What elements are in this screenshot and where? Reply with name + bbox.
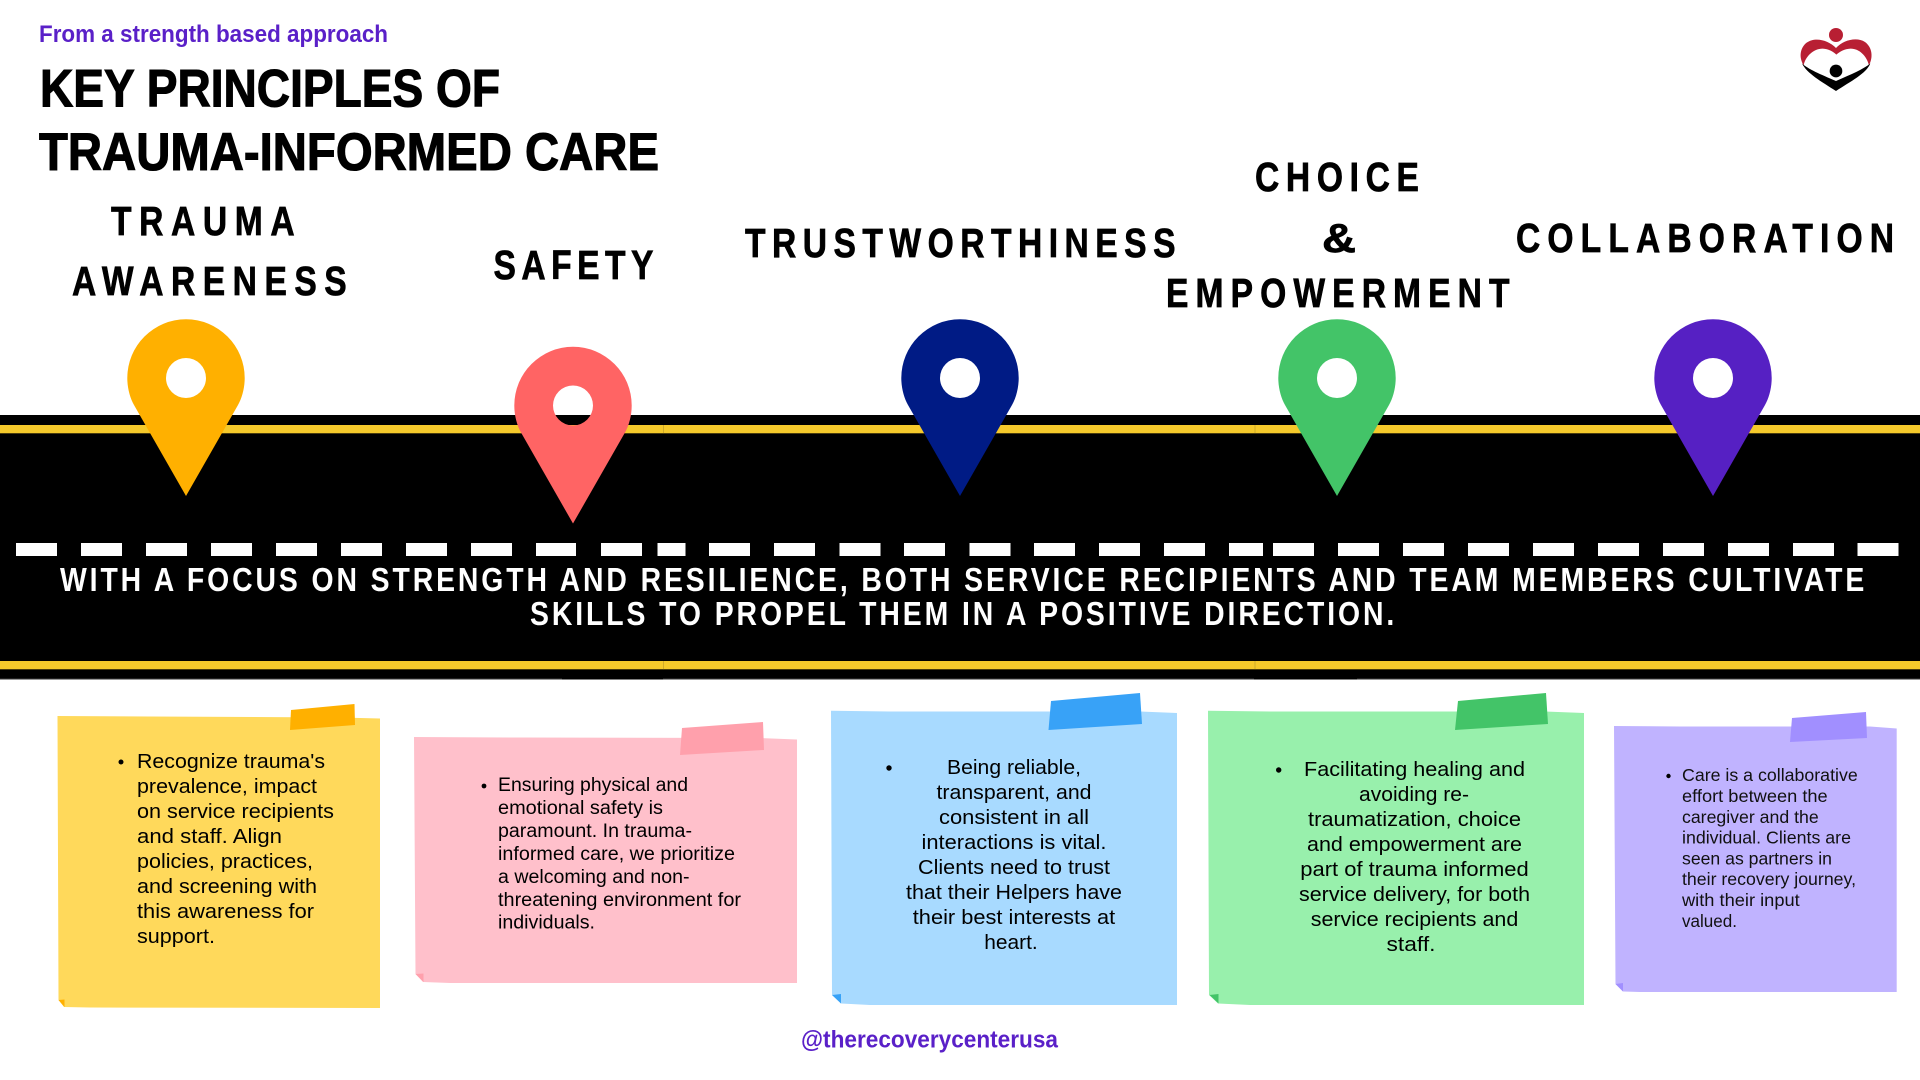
tape and fold — [1616, 712, 1867, 992]
note text: and empowerment are — [1307, 833, 1522, 856]
title — [39, 60, 659, 182]
heading: trauma awareness: TRAUMA — [111, 198, 295, 244]
note text: prevalence, impact — [137, 775, 317, 798]
note text: traumatization, choice — [1308, 808, 1521, 831]
note text: seen as partners in — [1682, 848, 1832, 868]
pin: trustworthiness — [901, 319, 1019, 496]
tape and fold — [416, 722, 764, 982]
note text: that their Helpers have — [906, 881, 1122, 904]
road message — [60, 561, 1864, 633]
note text: Being reliable, — [947, 756, 1081, 779]
panel: trauma awareness note — [58, 704, 380, 1008]
note text: policies, practices, — [137, 850, 313, 873]
note text: Facilitating healing and — [1304, 758, 1525, 781]
note text: individuals. — [498, 912, 595, 934]
note text: Clients need to trust — [918, 856, 1110, 879]
social handle: @therecoverycenterusa — [801, 1026, 1059, 1054]
note text: and staff. Align — [137, 825, 282, 848]
heading: trauma awareness — [72, 198, 347, 304]
title: KEY PRINCIPLES OF — [40, 60, 500, 118]
note text — [118, 750, 334, 948]
heading: safety: SAFETY — [494, 242, 653, 288]
heading: choice and empowerment — [1166, 154, 1510, 316]
note text: with their input — [1681, 890, 1800, 910]
note text: support. — [137, 925, 215, 948]
pin: safety — [514, 347, 632, 524]
note text: Recognize trauma's — [137, 750, 325, 773]
note text: part of trauma informed — [1300, 858, 1529, 881]
tape and fold — [832, 693, 1142, 1004]
note text: Care is a collaborative — [1682, 765, 1858, 785]
road band — [0, 415, 1920, 680]
heading: choice and empowerment: CHOICE — [1255, 154, 1419, 200]
note text: valued. — [1682, 911, 1737, 931]
principle headings — [72, 154, 1894, 316]
panel: choice and empowerment note — [1208, 693, 1584, 1005]
note text: Ensuring physical and — [498, 775, 688, 796]
note text — [482, 775, 742, 934]
heading: choice and empowerment: & — [1322, 215, 1356, 261]
heading: choice and empowerment: EMPOWERMENT — [1166, 270, 1510, 316]
note text: on service recipients — [137, 800, 334, 823]
note text: transparent, and — [936, 781, 1092, 804]
note text: heart. — [984, 931, 1038, 954]
note text: informed care, we prioritize — [498, 844, 735, 865]
note text — [1666, 765, 1858, 931]
note text: their recovery journey, — [1682, 869, 1856, 889]
note text: service recipients and — [1311, 908, 1518, 931]
note text: a welcoming and non- — [498, 867, 690, 888]
tape and fold — [1210, 693, 1548, 1004]
note text: paramount. In trauma- — [498, 821, 692, 842]
header — [39, 22, 659, 182]
pin: collaboration — [1654, 319, 1772, 496]
note text: individual. Clients are — [1682, 828, 1851, 848]
tape and fold — [58, 704, 355, 1007]
note text: and screening with — [137, 875, 317, 898]
road message: SKILLS TO PROPEL THEM IN A POSITIVE DIRECTION. — [530, 595, 1394, 633]
panel: collaboration note — [1614, 712, 1897, 992]
heading: trustworthiness: TRUSTWORTHINESS — [745, 220, 1175, 266]
note text: consistent in all — [939, 806, 1089, 829]
note text: interactions is vital. — [922, 831, 1106, 854]
note text: avoiding re- — [1359, 783, 1469, 806]
note text: staff. — [1386, 933, 1436, 956]
pin: trauma awareness — [127, 319, 245, 496]
note text — [886, 756, 1122, 954]
note text: this awareness for — [137, 900, 314, 923]
note text: emotional safety is — [498, 798, 663, 819]
panel: trustworthiness note — [831, 693, 1177, 1005]
subtitle: From a strength based approach — [39, 22, 388, 48]
note text: caregiver and the — [1682, 807, 1819, 827]
note text: their best interests at — [913, 906, 1116, 929]
note text: service delivery, for both — [1299, 883, 1530, 906]
icon: heart logo — [1801, 28, 1872, 91]
panel: safety note — [414, 722, 797, 983]
road message: WITH A FOCUS ON STRENGTH AND RESILIENCE, BOTH SERVICE RECIPIENTS AND TEAM MEMBERS CULTIVATE — [60, 561, 1864, 599]
pin: choice and empowerment — [1278, 319, 1396, 496]
lane dashes — [16, 543, 1898, 556]
note text: threatening environment for — [498, 890, 742, 911]
note text: effort between the — [1682, 786, 1828, 806]
heading: collaboration: COLLABORATION — [1516, 215, 1894, 261]
title: TRAUMA-INFORMED CARE — [39, 123, 659, 182]
heading: trauma awareness: AWARENESS — [72, 258, 347, 304]
note text — [1276, 758, 1530, 956]
